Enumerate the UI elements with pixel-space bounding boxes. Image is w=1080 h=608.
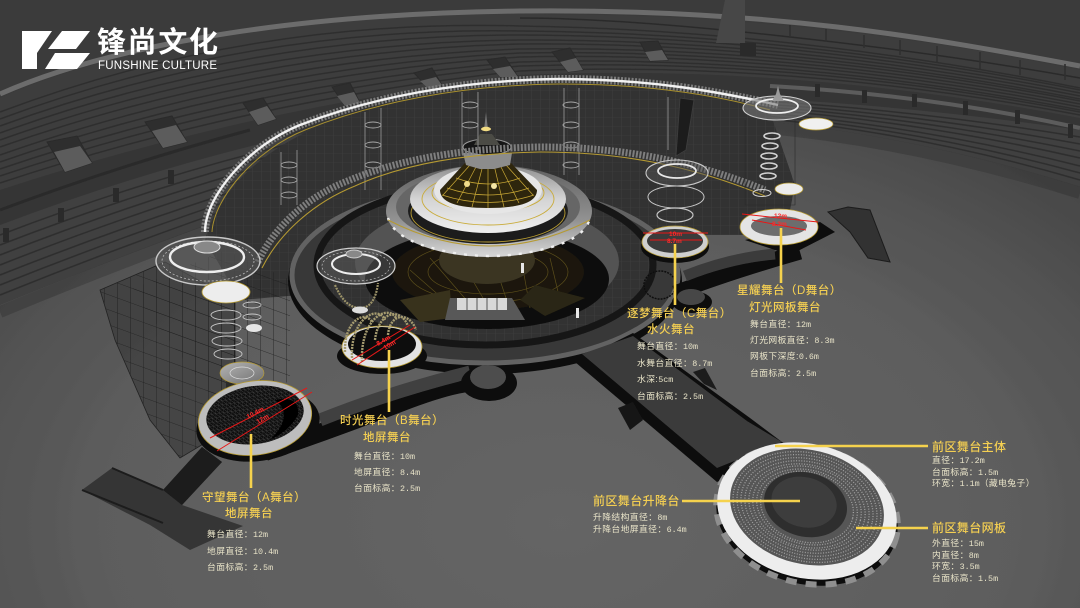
stage C truss discs bbox=[644, 160, 708, 299]
label: stage B: 舞台直径：10m bbox=[354, 450, 415, 462]
support columns bbox=[281, 88, 668, 205]
stage A ring: 10.4m bbox=[246, 406, 265, 421]
tower turret and spire bbox=[463, 112, 512, 169]
stage D ring: 12m bbox=[774, 213, 787, 220]
rear left access ramp bbox=[82, 447, 243, 550]
label: stage A: 地屏舞台 bbox=[225, 506, 273, 520]
label: front stage mesh: 台面标高：1.5m bbox=[932, 572, 998, 584]
label: front stage mesh: 外直径：15m bbox=[932, 537, 984, 549]
label: stage D: 灯光网板舞台 bbox=[749, 300, 821, 314]
side walkway arms bbox=[265, 222, 835, 452]
logo wordmark: 锋尚文化 bbox=[97, 19, 218, 61]
label: stage D: 网板下深度:0.6m bbox=[750, 350, 819, 362]
label: stage A: 台面标高：2.5m bbox=[207, 561, 273, 573]
stage D ring bbox=[740, 209, 818, 283]
stage C ring: 8.7m bbox=[667, 238, 682, 245]
label: front stage lift bbox=[593, 493, 687, 535]
logo bbox=[22, 19, 218, 72]
label: front stage body: 直径：17.2m bbox=[932, 454, 985, 466]
label: stage B: 地屏舞台 bbox=[363, 430, 411, 444]
label: front stage lift: 前区舞台升降台 bbox=[593, 493, 680, 508]
small pad near stage C bbox=[672, 289, 712, 313]
stage A ring: 12m bbox=[256, 413, 270, 426]
human figures bbox=[521, 263, 579, 318]
stage C ring: 10m bbox=[669, 231, 682, 238]
label: stage C bbox=[627, 306, 732, 402]
label: stage D: 灯光网板直径：8.3m bbox=[750, 334, 834, 346]
label: stage D: 台面标高：2.5m bbox=[750, 367, 816, 379]
label: stage B bbox=[340, 413, 444, 494]
label: stage B: 地屏直径：8.4m bbox=[354, 466, 420, 478]
label: stage C: 水深:5cm bbox=[637, 373, 673, 385]
main circular platform bbox=[288, 185, 682, 374]
label: stage D bbox=[737, 283, 842, 379]
label: front stage body bbox=[932, 439, 1035, 489]
label: stage C: 水舞台直径：8.7m bbox=[637, 357, 712, 369]
label: stage D: 舞台直径：12m bbox=[750, 318, 811, 330]
label: front stage body: 台面标高：1.5m bbox=[932, 466, 998, 478]
label: stage C: 逐梦舞台（C舞台） bbox=[627, 306, 732, 320]
lower bowl with gold lattice bbox=[392, 234, 585, 322]
label: front stage body: 环宽：1.1m（藏电兔子） bbox=[932, 477, 1035, 489]
label: front stage mesh: 前区舞台网板 bbox=[932, 520, 1006, 535]
lower truss arc bbox=[258, 147, 765, 268]
label: stage C: 台面标高：2.5m bbox=[637, 390, 703, 402]
label: stage A: 地屏直径：10.4m bbox=[207, 545, 278, 557]
stand window notches bbox=[47, 41, 668, 172]
logo english name: FUNSHINE CULTURE bbox=[98, 60, 217, 72]
stage D truss disc and white discs bbox=[743, 86, 833, 205]
label: stage A: 舞台直径：12m bbox=[207, 528, 268, 540]
stage A ring bbox=[192, 373, 324, 488]
dark tower behind stage C bbox=[676, 98, 694, 156]
stage B truss disc and cable bbox=[317, 248, 395, 314]
front walkway bbox=[575, 333, 790, 482]
label: stage D: 星耀舞台（D舞台） bbox=[737, 283, 842, 297]
stadium roof rail bbox=[0, 11, 1080, 94]
label: front stage mesh: 环宽：3.5m bbox=[932, 560, 980, 572]
front stage bbox=[682, 424, 928, 604]
stage A lift pad bbox=[220, 362, 264, 405]
label: stage B: 台面标高：2.5m bbox=[354, 482, 420, 494]
stage D ring: 8.3m bbox=[772, 221, 787, 228]
label: stage C: 水火舞台 bbox=[647, 322, 695, 336]
label: stage B: 时光舞台（B舞台） bbox=[340, 413, 444, 427]
stage C ring bbox=[641, 226, 709, 305]
label: front stage mesh bbox=[932, 520, 1006, 584]
stage A hanging truss disc and column bbox=[156, 237, 262, 359]
circular pad on platform edge bbox=[461, 365, 517, 401]
label: stage A bbox=[202, 490, 306, 573]
label: front stage lift: 升降台地屏直径：6.4m bbox=[593, 523, 687, 535]
front stage mesh bbox=[718, 433, 896, 581]
right access stairs bbox=[828, 207, 890, 262]
stage B ring with gold arches: 8.4m bbox=[376, 334, 392, 348]
label: front stage mesh: 内直径：8m bbox=[932, 549, 979, 561]
upper truss arc bbox=[205, 79, 778, 232]
upper stand tier bbox=[0, 14, 1080, 200]
left scaffold wireframe bbox=[100, 250, 290, 458]
golden lattice dome bbox=[440, 163, 537, 208]
label: front stage lift: 升降结构直径：8m bbox=[593, 511, 667, 523]
stage B ring with gold arches bbox=[337, 313, 427, 412]
logo mark bbox=[22, 31, 90, 69]
truss backdrop screen bbox=[205, 77, 795, 300]
label: front stage body: 前区舞台主体 bbox=[932, 439, 1006, 454]
stand walkway band and lower tier bbox=[0, 73, 1080, 305]
stage B ring with gold arches: 10m bbox=[382, 339, 397, 352]
label: stage A: 守望舞台（A舞台） bbox=[202, 490, 306, 504]
roof tower bbox=[716, 0, 756, 56]
central tower bbox=[386, 112, 592, 257]
label: stage C: 舞台直径：10m bbox=[637, 340, 698, 352]
